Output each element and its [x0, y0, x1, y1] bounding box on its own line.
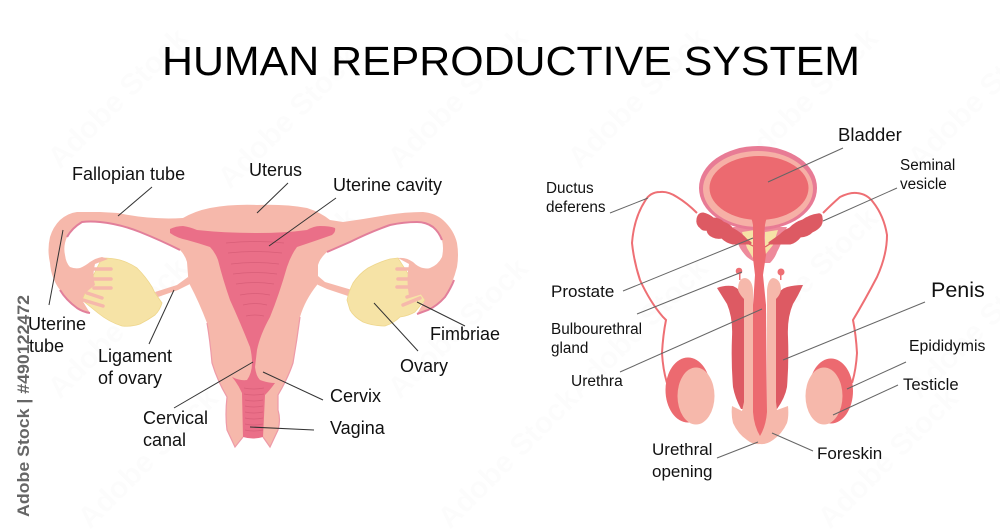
icon: corpus spongiosum	[732, 278, 788, 444]
text: Adobe Stock	[212, 202, 365, 355]
labels: female: Vagina	[330, 418, 386, 438]
icon: left testicle	[666, 358, 714, 424]
labels: female: Ligament	[98, 346, 172, 366]
leader lines: female	[49, 183, 465, 430]
labels: female: canal	[143, 430, 186, 450]
labels: male: Bulbourethral	[551, 321, 642, 338]
icon: urethra	[748, 212, 770, 436]
text: Adobe Stock	[42, 22, 195, 175]
title: HUMAN REPRODUCTIVE SYSTEM	[162, 38, 860, 84]
labels: male: Prostate	[551, 282, 614, 301]
labels: female: tube	[29, 336, 64, 356]
labels: female: Fimbriae	[430, 324, 500, 344]
text: Adobe Stock	[42, 252, 195, 405]
labels: male: opening	[652, 462, 713, 481]
icon: ejaculatory ducts	[745, 242, 773, 247]
text: Adobe Stock	[432, 382, 585, 531]
icon: bulbourethral glands	[736, 268, 784, 280]
text: Adobe Stock	[562, 22, 715, 175]
labels: male: Foreskin	[817, 444, 882, 463]
labels: female	[28, 160, 500, 450]
labels: male: Urethra	[571, 373, 623, 390]
text: Adobe Stock	[212, 42, 365, 195]
panel: male reproductive system	[546, 124, 985, 481]
labels: male: deferens	[546, 199, 606, 216]
icon: bladder	[699, 146, 817, 230]
labels: female: of ovary	[98, 368, 162, 388]
icon: uterine cavity folds	[226, 242, 284, 431]
text: Adobe Stock	[812, 382, 965, 531]
text: Adobe Stock	[382, 22, 535, 175]
icon: uterine cavity	[170, 226, 335, 438]
watermark: stock id: Adobe Stock | #490122472	[14, 295, 33, 517]
labels: female: Uterine	[28, 314, 86, 334]
labels: male	[546, 124, 985, 481]
labels: male: Seminal	[900, 157, 955, 174]
panel: female reproductive system	[28, 160, 500, 450]
text: Adobe Stock	[732, 202, 885, 355]
illustration: female anatomy	[48, 205, 458, 447]
icon: right fimbriae	[397, 269, 420, 305]
icon: ovarian ligaments	[155, 276, 352, 297]
labels: male: Penis	[931, 278, 985, 302]
icon: tube edge highlights	[60, 222, 454, 447]
leader lines: male	[610, 148, 925, 458]
icon: right testicle	[806, 358, 853, 424]
labels: male: Bladder	[838, 124, 902, 145]
labels: female: Ovary	[400, 356, 448, 376]
labels: female: Uterus	[249, 160, 302, 180]
labels: male: vesicle	[900, 176, 947, 193]
labels: female: Cervix	[330, 386, 381, 406]
labels: male: Urethral	[652, 440, 712, 459]
text: Adobe Stock	[732, 22, 885, 175]
icon: tube and uterus outline	[48, 205, 458, 447]
labels: female: Uterine cavity	[333, 175, 442, 195]
labels: male: Testicle	[903, 375, 959, 394]
labels: female: Fallopian tube	[72, 164, 185, 184]
labels: male: gland	[551, 340, 588, 357]
icon: vas deferens	[632, 192, 887, 383]
icon: prostate	[733, 227, 787, 263]
icon: left fimbriae	[83, 269, 111, 306]
icon: seminal vesicles	[698, 214, 821, 243]
labels: female: Cervical	[143, 408, 208, 428]
text: Adobe Stock	[562, 252, 715, 405]
icon: left ovary	[82, 258, 162, 326]
illustration: male anatomy	[632, 146, 887, 444]
labels: male: Ductus	[546, 180, 594, 197]
text: Adobe Stock	[382, 252, 535, 405]
labels: male: Epididymis	[909, 338, 985, 355]
icon: corpus cavernosum	[717, 285, 803, 409]
icon: right ovary	[347, 258, 425, 326]
text: Adobe Stock	[72, 382, 225, 531]
